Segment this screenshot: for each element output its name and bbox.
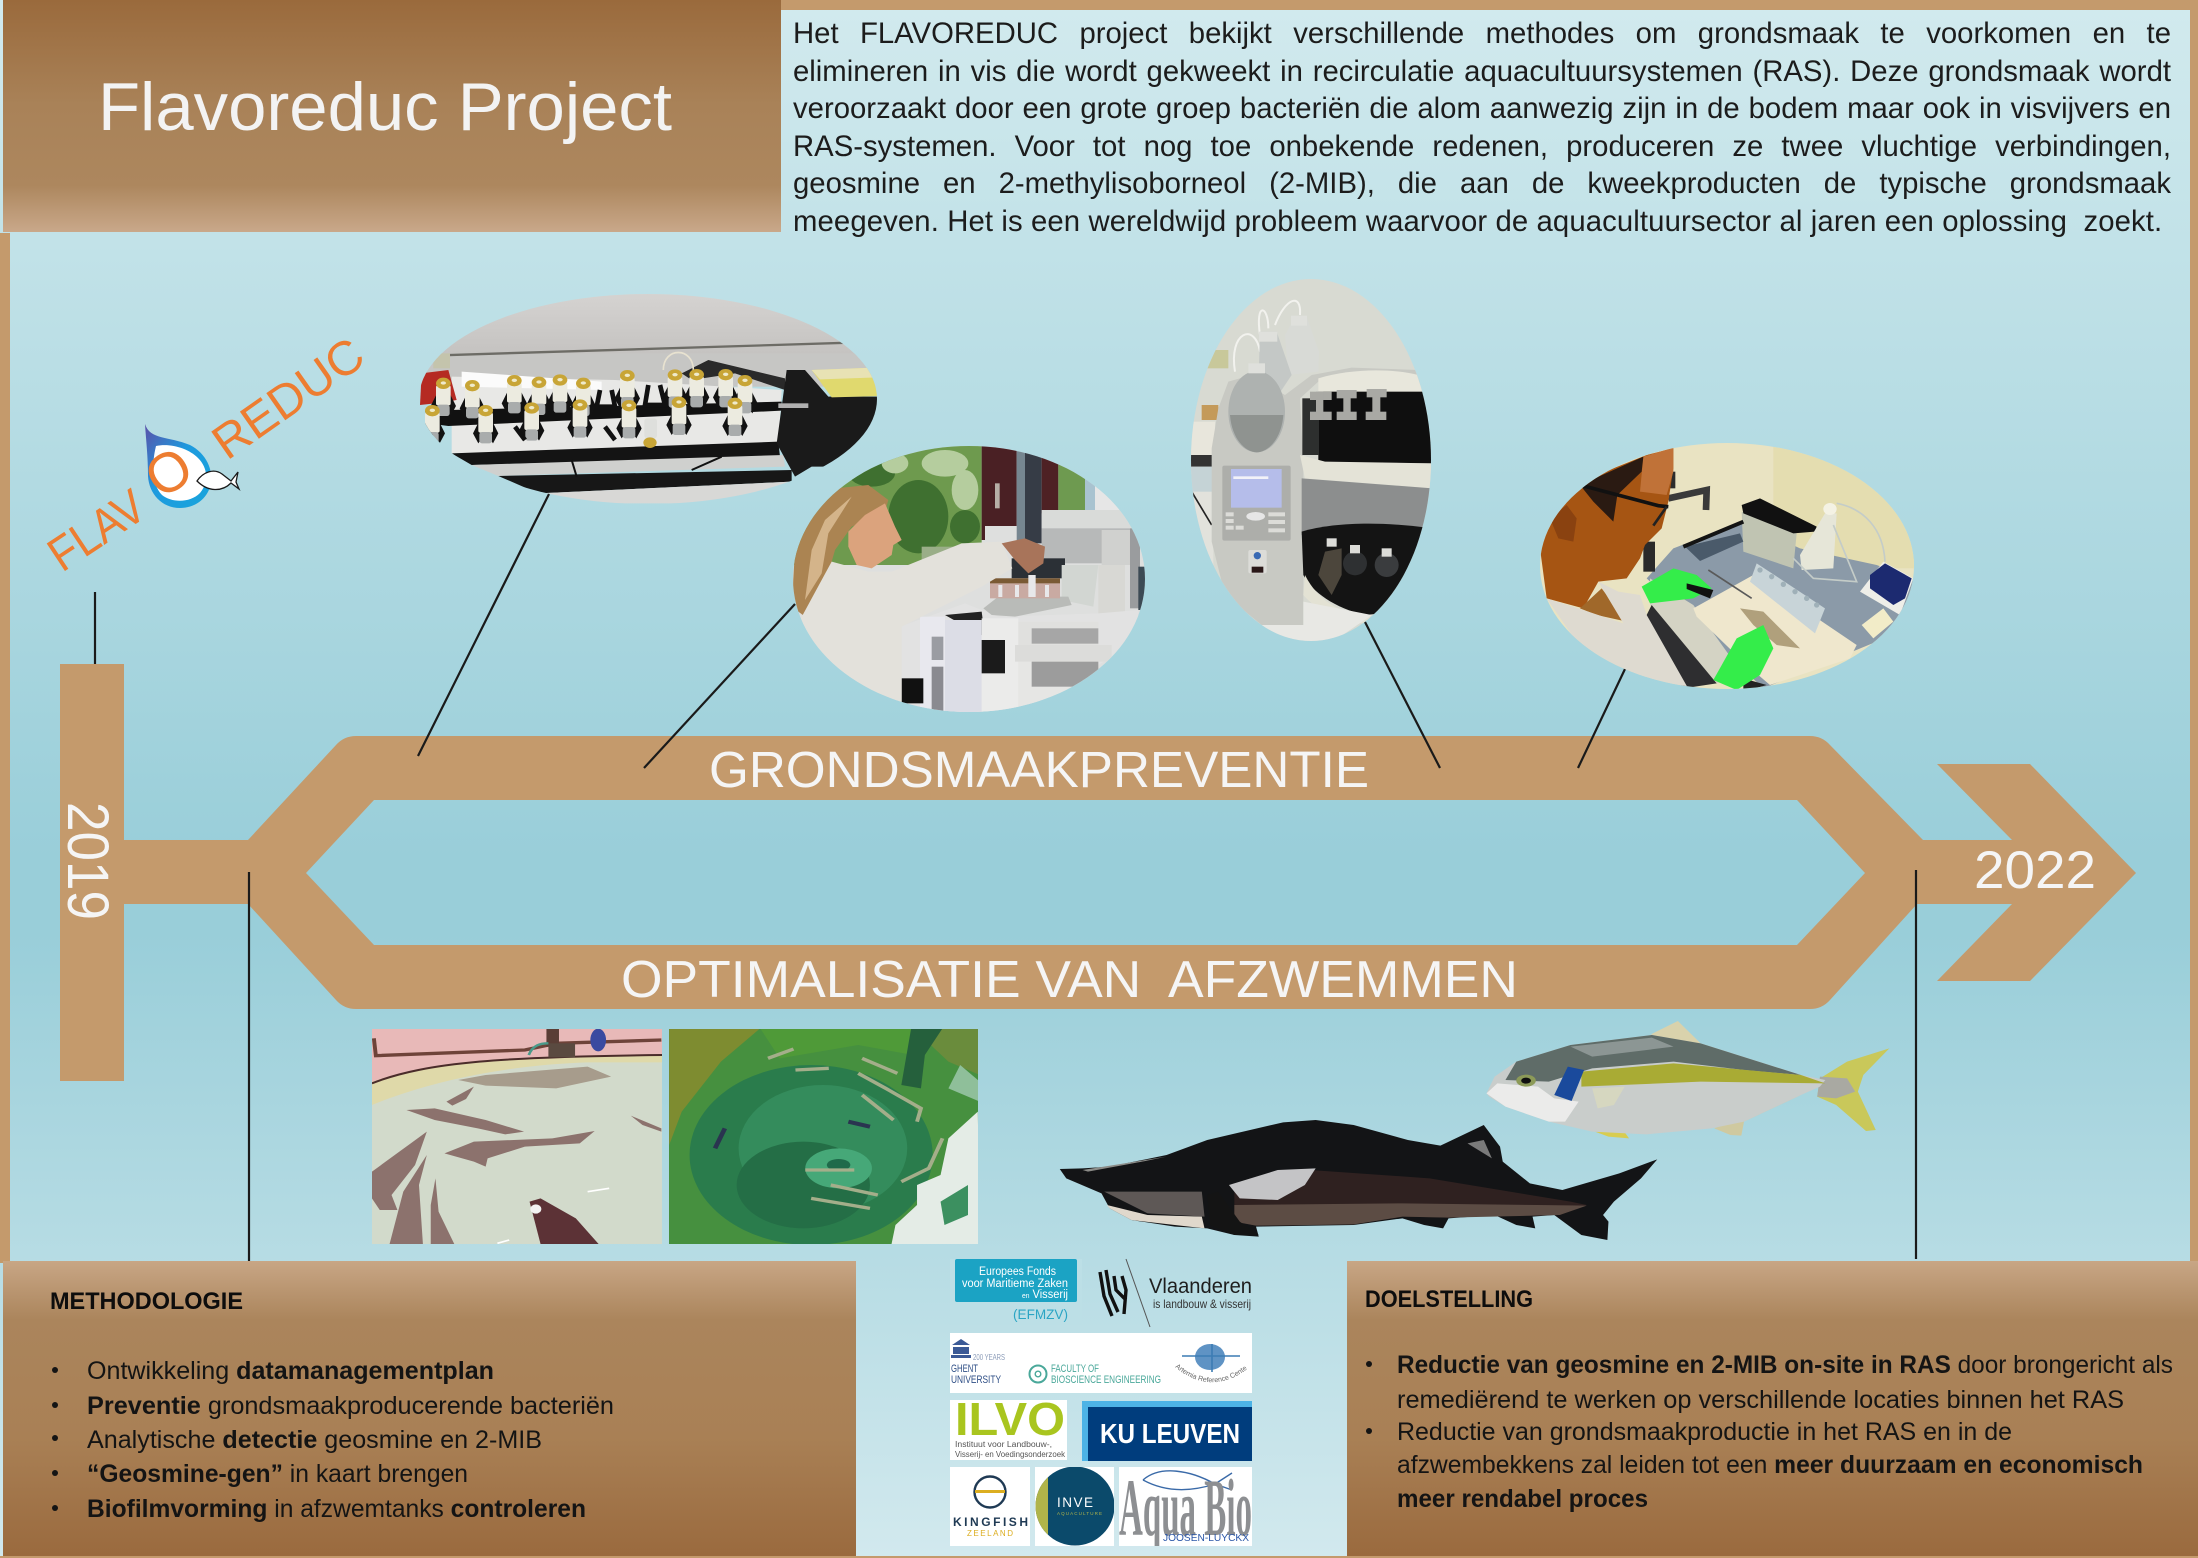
logo: Kingfish Zeeland: ZEELAND xyxy=(967,1529,1013,1538)
heading: methodologie: METHODOLOGIE xyxy=(50,1288,243,1315)
logo: INVE Aquaculture: INVE xyxy=(1057,1495,1093,1510)
logo: INVE Aquaculture xyxy=(1035,1467,1114,1546)
logo: INVE Aquaculture: AQUACULTURE xyxy=(1057,1511,1102,1516)
logo: KU Leuven: KU LEUVEN xyxy=(1100,1418,1240,1449)
logo drop highlight xyxy=(153,445,206,501)
text: Aqua Bio xyxy=(1119,1462,1252,1553)
text block: project introduction: Het FLAVOREDUC project bekijkt verschillende methodes om grondsmaak te voorkomen en te xyxy=(793,17,2171,50)
logo: Aqua Bio xyxy=(1119,1467,1252,1546)
logo: Ghent University: FACULTY OF xyxy=(1051,1363,1099,1375)
logo: Ghent University: BIOSCIENCE ENGINEERING xyxy=(1051,1374,1161,1386)
text block: project introduction xyxy=(793,17,2171,238)
logo: ILVO: Visserij- en Voedingsonderzoek xyxy=(955,1450,1066,1459)
logo word: FLAV: FLAV xyxy=(39,480,156,582)
heading: optimalisatie van afzwemmen: OPTIMALISATIE VAN AFZWEMMEN xyxy=(621,951,1518,1009)
photo: analytical instrument xyxy=(1185,275,1435,645)
logo: ILVO xyxy=(950,1393,1067,1460)
logo: Vlaanderen xyxy=(1100,1259,1252,1327)
bullet list: doelstelling: afzwembekkens zal leiden tot een meer duurzaam en economisch xyxy=(1397,1451,2143,1479)
heading: grondsmaakpreventie: GRONDSMAAKPREVENTIE xyxy=(709,741,1369,798)
text block: project introduction: meegeven. Het is een wereldwijd probleem waarvoor de aquacultuursector al jaren een oplossing zoekt. xyxy=(793,205,2162,238)
heading: doelstelling: DOELSTELLING xyxy=(1365,1286,1533,1313)
arrow: timeline double arrow xyxy=(124,736,2136,1009)
bullet list: methodologie: Preventie grondsmaakproducerende bacteriën xyxy=(87,1392,614,1420)
logo: KU Leuven xyxy=(1082,1401,1252,1461)
bottom strip xyxy=(0,1556,2198,1558)
logo: EFMZV: Europees Fonds xyxy=(979,1266,1056,1278)
timeline start bar xyxy=(60,664,124,1081)
photo: vials on rack xyxy=(415,290,880,503)
logo drop xyxy=(145,424,211,508)
logo: ILVO: Instituut voor Landbouw-, xyxy=(955,1440,1052,1449)
photo: researcher at instrument xyxy=(785,440,1150,715)
logo: ILVO: ILVO xyxy=(955,1393,1065,1445)
logo: EFMZV: (EFMZV) xyxy=(1013,1306,1068,1322)
top strip xyxy=(781,0,2198,10)
panel: title xyxy=(3,0,781,232)
year 2019: 2019 xyxy=(55,802,120,920)
logo: EFMZV: en Visserij xyxy=(1022,1289,1068,1301)
logo word: REDUC: REDUC xyxy=(203,328,374,470)
illustration: sturgeon xyxy=(1060,1120,1657,1240)
bullet list: doelstelling xyxy=(1366,1351,2173,1513)
bullet list: methodologie: Analytische detectie geosmine en 2-MIB xyxy=(87,1426,542,1454)
bullet list: doelstelling: Reductie van grondsmaakproductie in het RAS en in de xyxy=(1397,1418,2012,1446)
logo: Ghent University: 200 YEARS xyxy=(973,1353,1005,1362)
left border xyxy=(0,233,10,1263)
bullet list: doelstelling: Reductie van geosmine en 2-MIB on-site in RAS door brongericht als xyxy=(1397,1351,2173,1379)
heading: project title: Flavoreduc Project xyxy=(98,69,672,145)
bullet list: methodologie xyxy=(52,1357,614,1523)
panel: doelstelling xyxy=(1347,1261,2198,1556)
bullet list: methodologie: Ontwikkeling datamanagementplan xyxy=(87,1357,494,1385)
panel: methodologie xyxy=(3,1261,856,1556)
illustration: yellowtail kingfish xyxy=(1486,1021,1889,1138)
logo: Flavoreduc xyxy=(39,328,374,582)
logo letter O: O xyxy=(133,434,204,510)
year 2022: 2022 xyxy=(1974,841,2096,900)
logo: Aqua Bio: JOOSEN-LUYCKX xyxy=(1163,1532,1249,1544)
logo: Vlaanderen: Vlaanderen xyxy=(1149,1275,1252,1298)
right border xyxy=(2190,10,2198,1265)
icon: fish xyxy=(197,471,239,490)
photo: fish swirl tank xyxy=(666,1025,984,1248)
photo: sturgeon tank xyxy=(368,1025,666,1248)
logo: Kingfish Zeeland: KINGFISH xyxy=(953,1515,1028,1529)
logo: Kingfish Zeeland xyxy=(950,1467,1030,1546)
bullet list: methodologie: “Geosmine-gen” in kaart brengen xyxy=(87,1460,468,1488)
logo: Ghent University: UNIVERSITY xyxy=(951,1374,1001,1386)
logo: Ghent University xyxy=(950,1333,1252,1393)
text block: project introduction: veroorzaakt door een grote groep bacteriën die alom aanwezig zijn in de bodem maar ook in visvijvers en xyxy=(793,92,2171,125)
photo: researcher dissecting fish xyxy=(1530,435,1920,695)
connector lines xyxy=(95,494,1916,1261)
logo: Vlaanderen: is landbouw & visserij xyxy=(1153,1297,1251,1311)
logo: EFMZV: voor Maritieme Zaken xyxy=(962,1278,1068,1290)
bullet list: doelstelling: remediërend te werken op verschillende locaties binnen het RAS xyxy=(1397,1386,2124,1414)
text block: project introduction: elimineren in vis die wordt gekweekt in recirculatie aquacultuursystemen (RAS). Deze grondsmaak wordt xyxy=(793,55,2171,88)
text block: project introduction: geosmine en 2-methylisoborneol (2-MIB), die aan de kweekproducten de typische grondsmaak xyxy=(793,167,2171,200)
bullet list: methodologie: Biofilmvorming in afzwemtanks controleren xyxy=(87,1495,586,1523)
text block: project introduction: RAS-systemen. Voor tot nog toe onbekende redenen, produceren ze twee vluchtige verbindingen, xyxy=(793,130,2171,163)
logo: Ghent University: GHENT xyxy=(951,1363,978,1375)
logo: Ghent University: Artemia Reference Center xyxy=(1175,1364,1246,1382)
bullet list: doelstelling: meer rendabel proces xyxy=(1397,1485,1648,1513)
logo: EFMZV xyxy=(950,1259,1082,1325)
